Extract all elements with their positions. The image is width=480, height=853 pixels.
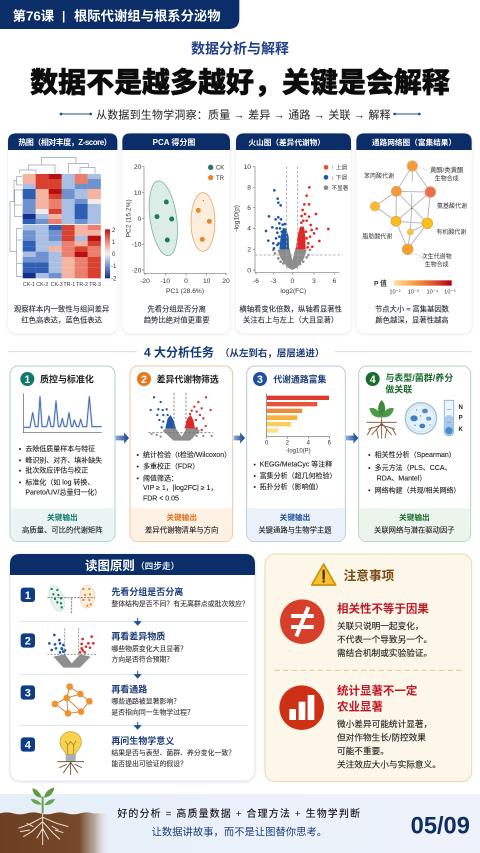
- card 1 bullets: [20, 444, 102, 496]
- card 2 title: 差异代谢物筛选: [157, 374, 219, 385]
- network caption: 节点大小 ≈ 富集基因数: [375, 305, 450, 314]
- step 1 badge: 1: [25, 590, 31, 602]
- network caption: [375, 305, 450, 325]
- card 4 bullets: 多元方法（PLS、CCA、: [375, 463, 452, 472]
- network nodes: [370, 161, 436, 255]
- card 2 bullets: 统计检验（t检验/Wilcoxon）: [143, 450, 231, 459]
- card 2 bullets: [138, 450, 231, 503]
- card 4 key output: 关键输出: [399, 512, 430, 522]
- step 3 icon: [55, 687, 89, 713]
- card 1 bullets: 标准化（如 log 转换、: [25, 477, 94, 486]
- lesson tab: 第76课: [13, 8, 55, 24]
- PCA axes: 10: [134, 190, 142, 197]
- footer: [0, 788, 480, 853]
- heatmap colour scale: -2: [111, 276, 117, 282]
- card 1 key output: 高质量、可比的代谢矩阵: [22, 526, 103, 535]
- caution 2 text: 关注效应大小与实际意义。: [337, 758, 441, 769]
- PCA axes: [125, 164, 230, 295]
- P value scale: 10⁻³: [408, 289, 419, 295]
- PCA axes: -20: [140, 278, 150, 285]
- volcano legend: ↓ 下调: [331, 174, 347, 182]
- badge 3: 3: [257, 374, 263, 386]
- badge 3: [253, 372, 267, 386]
- network labels: 氨基酸代谢: [437, 202, 467, 210]
- volcano axes: [234, 164, 339, 295]
- heatmap sample labels: [23, 282, 101, 288]
- chromatogram: [23, 393, 102, 433]
- network labels: 生物合成: [435, 174, 459, 182]
- network labels: [362, 165, 467, 269]
- PCA legend: CK: [216, 166, 224, 172]
- panel: heatmap: 热图（相对丰度，Z-score）: [18, 137, 112, 147]
- panel: pathway network: 通路网络图（富集结果）: [372, 137, 456, 147]
- panel: PCA: [122, 133, 230, 333]
- PCA legend: TR: [216, 176, 225, 182]
- step 3 text: [111, 683, 194, 717]
- PCA axes: -10: [161, 278, 170, 285]
- page header: [0, 0, 450, 122]
- card 1 bullets: 峰识别、对齐、填补缺失: [25, 455, 102, 464]
- card 4: association: [359, 366, 471, 542]
- volcano axes: 6: [247, 205, 251, 212]
- volcano axes: -3: [270, 278, 277, 285]
- card 2 bullets: 阈值筛选：: [143, 473, 178, 482]
- step 1 text: [111, 586, 249, 608]
- heatmap cells: [23, 174, 101, 224]
- card 1 bullets: 去除低质量样本与特征: [25, 444, 95, 453]
- card 1 key output: [22, 512, 103, 535]
- panel background: [10, 554, 255, 781]
- panel heading: （四步走）: [136, 560, 179, 571]
- volcano axes: 2: [247, 247, 251, 254]
- P value scale: P 值: [374, 278, 387, 287]
- panel: heatmap: [8, 133, 117, 333]
- step 2 text: 哪些物质变化大且显著？: [111, 644, 187, 653]
- card 3 bullets: KEGG/MetaCyc 等注释: [260, 460, 332, 469]
- heatmap caption: 红色高表达，蓝色低表达: [21, 316, 103, 325]
- tagline with decorated lines: 从数据到生物学洞察：质量 → 差异 → 通路 → 关联 → 解释: [96, 108, 391, 122]
- heatmap sample labels: TR-3: [89, 282, 101, 288]
- icon: warning triangle: [312, 564, 336, 585]
- card 2 bullets: VIP ≥ 1，|log2FC| ≥ 1，: [143, 485, 217, 492]
- volcano axes: -6: [253, 278, 259, 285]
- heatmap colour scale: 1: [112, 240, 116, 246]
- card 2: differential metabolites: [130, 366, 233, 542]
- footer message: 让数据讲故事，而不是让图替你思考。: [152, 825, 327, 838]
- step 4 text: 结果是否与表型、菌群、养分变化一致？: [111, 748, 235, 757]
- enrichment bar chart: 2: [286, 441, 290, 447]
- P value scale: 10⁻²: [389, 289, 401, 295]
- section heading: [8, 345, 324, 360]
- volcano caption: 横轴看变化倍数，纵轴看显著性: [239, 305, 342, 314]
- network labels: 黄酮/类黄酮: [430, 165, 463, 174]
- caution 1 text: 关联只说明一起变化，: [337, 620, 424, 631]
- footer band: [0, 794, 480, 853]
- section heading: （从左到右，层层递进）: [220, 348, 324, 360]
- step 1 text: 先看分组是否分离: [111, 586, 183, 597]
- caution 2 text: 农业显著: [337, 699, 383, 713]
- enrichment bar chart: 0: [265, 441, 269, 447]
- panel: volcano plot: 火山图（差异代谢物）: [248, 137, 325, 147]
- volcano axes: 8: [247, 185, 251, 192]
- volcano axes: -log10(p): [234, 205, 241, 232]
- card 3 bullets: 富集分析（超几何检验）: [260, 471, 337, 480]
- badge 2: [137, 372, 151, 386]
- card 4 title: 与表型/菌群/养分: [385, 372, 453, 383]
- lesson tab: [0, 0, 239, 29]
- badge 2: 2: [141, 374, 147, 386]
- caution background: [265, 554, 472, 782]
- step 2 text: 方向是否符合预期？: [111, 655, 173, 664]
- icon: NPK test tube: [444, 400, 464, 436]
- card 4 bullets: RDA、Mantel）: [377, 475, 426, 483]
- network labels: 脂肪酸代谢: [362, 233, 392, 241]
- card 3 key output: [258, 512, 332, 535]
- PCA caption: [144, 305, 210, 325]
- P value scale: 10⁻⁴: [426, 288, 439, 295]
- step 3 badge: 3: [25, 688, 31, 700]
- card 1 key output: 关键输出: [47, 512, 78, 522]
- lesson tab: 根际代谢组与根系分泌物: [74, 8, 221, 24]
- section heading: 4 大分析任务: [144, 345, 214, 360]
- volcano legend: 不显著: [331, 184, 349, 192]
- caution divider: [274, 669, 462, 672]
- heatmap colour scale: 2: [112, 228, 116, 234]
- caution 1 text: 需结合机制或实验验证。: [337, 647, 432, 658]
- enrichment bar chart: 6: [328, 441, 332, 447]
- network caption: 颜色越深，显著性越高: [375, 316, 449, 325]
- enrichment bar chart: -log10(P): [286, 449, 311, 455]
- card 3 key output: 关键通路与生物学主题: [258, 526, 332, 535]
- card 4 bullets: 网络构建（共现/相关网络）: [375, 485, 460, 494]
- caution 1 text: 不代表一个导致另一个。: [337, 634, 432, 645]
- card 2 key output: [145, 512, 218, 535]
- panels: volcano and network: [234, 133, 472, 333]
- card 1: quality control: [10, 366, 115, 542]
- panels: heatmap and PCA: [8, 133, 230, 333]
- step 4 badge: [21, 737, 35, 752]
- volcano axes: 3: [312, 278, 316, 285]
- heatmap sample labels: TR-2: [76, 282, 88, 288]
- small volcano: [148, 393, 213, 441]
- volcano points: [255, 167, 343, 270]
- icon: plant with roots: [367, 400, 397, 439]
- step 1 icon: [46, 584, 95, 614]
- footer message: 好的分析 = 高质量数据 + 合理方法 + 生物学判断: [117, 807, 360, 820]
- arrow 2 to 3: [234, 432, 245, 444]
- card 1 bullets: Pareto/UV/总量归一化）: [25, 487, 101, 496]
- icon: NPK test tube: K: [459, 427, 464, 433]
- card 2 bullets: 多重校正（FDR）: [143, 462, 199, 471]
- page number: 05/09: [411, 813, 470, 839]
- volcano caption: 关注右上与左上（大且显著）: [243, 316, 338, 325]
- network labels: 生物合成: [425, 261, 449, 269]
- card 4 title: 做关联: [385, 384, 412, 395]
- PCA axes: -20: [132, 267, 142, 274]
- panel: pathway network: [356, 133, 472, 333]
- card 4 key output: [374, 512, 455, 535]
- arrow 1 to 2: [116, 432, 129, 444]
- caution 2 text: 但对作物生长/防控效果: [337, 731, 426, 742]
- step 2 badge: [21, 633, 35, 648]
- badge 1: 1: [24, 374, 30, 386]
- panel heading: [10, 554, 255, 575]
- card 4 title: [385, 372, 453, 395]
- PCA axes: 0: [138, 216, 142, 223]
- card 4 bullets: 相关性分析（Spearman）: [375, 450, 456, 459]
- step 2 text: 再看差异物质: [111, 631, 165, 642]
- PCA axes: 20: [222, 278, 230, 285]
- card 4 bullets: [369, 450, 460, 494]
- caution 1 text: 相关性不等于因果: [337, 602, 429, 616]
- heatmap colour scale: [105, 228, 117, 282]
- heatmap sample labels: CK-3: [51, 282, 63, 288]
- heatmap dendrograms: [10, 157, 95, 277]
- panel: PCA: PCA 得分图: [153, 137, 195, 147]
- volcano legend: [324, 164, 349, 192]
- step 3 text: 哪些通路被显著影响？: [111, 697, 180, 706]
- step 3 text: 再看通路: [111, 683, 147, 694]
- main title: 数据不是越多越好，关键是会解释: [30, 67, 450, 98]
- PCA caption: 趋势比绝对值更重要: [144, 316, 210, 325]
- badge 4: [366, 372, 380, 386]
- panel heading: 读图原则: [85, 558, 135, 573]
- step 4 text: 能否提出可验证的假设？: [111, 759, 187, 768]
- card 3 title: 代谢通路富集: [273, 374, 326, 385]
- PCA group TR: [191, 193, 215, 251]
- P value scale: [374, 278, 456, 295]
- enrichment bar chart: [265, 393, 332, 455]
- caution 2 text: [337, 684, 441, 769]
- icon: light bulb with roots: [57, 732, 84, 775]
- icon: NPK test tube: P: [459, 416, 463, 422]
- PCA axes: -10: [132, 242, 142, 249]
- card 4 key output: 关联网络与潜在驱动因子: [374, 526, 455, 535]
- card 2 key output: 关键输出: [166, 512, 197, 522]
- network labels: 次生代谢物: [422, 252, 452, 260]
- step 1: [21, 584, 249, 614]
- PCA caption: 先看分组是否分离: [147, 305, 206, 314]
- caution 1: [280, 599, 432, 658]
- PCA axes: PC1 (28.6%): [166, 288, 204, 295]
- heatmap caption: [14, 305, 109, 325]
- caution 2 text: 统计显著不一定: [337, 684, 418, 698]
- icon: petri dish: [405, 403, 437, 434]
- card 2 key output: 差异代谢物清单与方向: [145, 526, 218, 535]
- card 1 title: 质控与标准化: [40, 374, 94, 385]
- card 2 bullets: FDR < 0.05: [143, 496, 179, 503]
- icon: bar chart: [279, 685, 324, 730]
- card 3 bullets: [255, 460, 337, 491]
- volcano axes: 10: [244, 164, 251, 171]
- badge 4: 4: [370, 374, 376, 386]
- enrichment bar chart: 4: [307, 441, 311, 447]
- heatmap cells lower block: [23, 225, 101, 278]
- card 3 key output: 关键输出: [280, 512, 310, 522]
- step 1 badge: [21, 588, 35, 602]
- caution 2 text: 微小差异可能统计显著，: [337, 718, 432, 729]
- card 3 bullets: 拓扑分析（影响值）: [260, 482, 323, 491]
- volcano axes: 6: [332, 278, 336, 285]
- caution heading: 注意事项: [344, 568, 395, 583]
- panel: cautions: [265, 554, 472, 782]
- step 4 text: 再问生物学意义: [111, 735, 174, 746]
- volcano axes: 0: [290, 278, 294, 285]
- step 4 text: [111, 735, 235, 768]
- step 2 text: [111, 631, 187, 664]
- P value scale: 10⁻⁵: [444, 288, 456, 295]
- heatmap caption: 观察样本内一致性与组间差异: [14, 305, 109, 314]
- PCA legend: [208, 165, 225, 182]
- badge 1: [20, 372, 34, 386]
- card 3: pathway enrichment: [247, 366, 345, 542]
- heatmap sample labels: TR-1: [63, 282, 75, 288]
- subtitle: 数据分析与解释: [191, 41, 289, 57]
- step 4 badge: 4: [25, 740, 32, 752]
- PCA axes: PC2 (15.2%): [125, 199, 132, 237]
- footer message: [117, 807, 360, 838]
- step 2: [21, 628, 187, 668]
- PCA group CK: [145, 179, 182, 257]
- heatmap colour scale: -1: [111, 264, 117, 270]
- step 2 badge: 2: [25, 636, 31, 648]
- section: four tasks (right half): [247, 352, 472, 542]
- soil with plant and roots: [0, 788, 110, 853]
- network edges: [375, 166, 430, 249]
- section: four tasks (left half): [8, 345, 324, 542]
- arrow 3 to 4: [346, 432, 358, 444]
- step 4: [21, 732, 235, 775]
- heatmap colour scale: 0: [112, 252, 116, 258]
- lesson tab: |: [62, 9, 65, 23]
- heatmap sample labels: CK-1: [23, 282, 35, 288]
- caution 1 text: [337, 602, 432, 658]
- step dividers with arrows: [20, 618, 247, 729]
- network labels: 苯丙酸代谢: [364, 172, 394, 180]
- section rule right: [335, 350, 472, 353]
- step 3 text: 是否指向同一生物学过程？: [111, 708, 194, 717]
- network labels: 有机酸代谢: [436, 228, 466, 236]
- volcano axes: log2(FC): [280, 288, 306, 295]
- PCA axes: 10: [203, 278, 211, 285]
- card 1 bullets: 批次效应评估与校正: [25, 466, 88, 475]
- PCA axes: 20: [134, 164, 142, 171]
- volcano legend: ↑ 上调: [331, 164, 347, 172]
- step 3: [21, 683, 194, 717]
- panel: volcano plot: [234, 133, 351, 333]
- icon: not equal: [280, 599, 325, 644]
- PCA axes: 0: [184, 278, 188, 285]
- heatmap sample labels: CK-2: [36, 282, 48, 288]
- volcano axes: 0: [247, 267, 251, 274]
- panel: reading principles: [10, 554, 255, 781]
- caution 2 text: 可能不重要。: [337, 745, 389, 756]
- step 3 badge: [21, 685, 35, 700]
- icon: NPK test tube: N: [459, 405, 463, 411]
- volcano caption: [239, 305, 342, 325]
- step 1 text: 整体结构是否不同？有无离群点或批次效应？: [111, 599, 249, 608]
- volcano axes: 4: [247, 226, 251, 233]
- step 2 icon: [47, 628, 96, 668]
- caution 2: [279, 684, 441, 769]
